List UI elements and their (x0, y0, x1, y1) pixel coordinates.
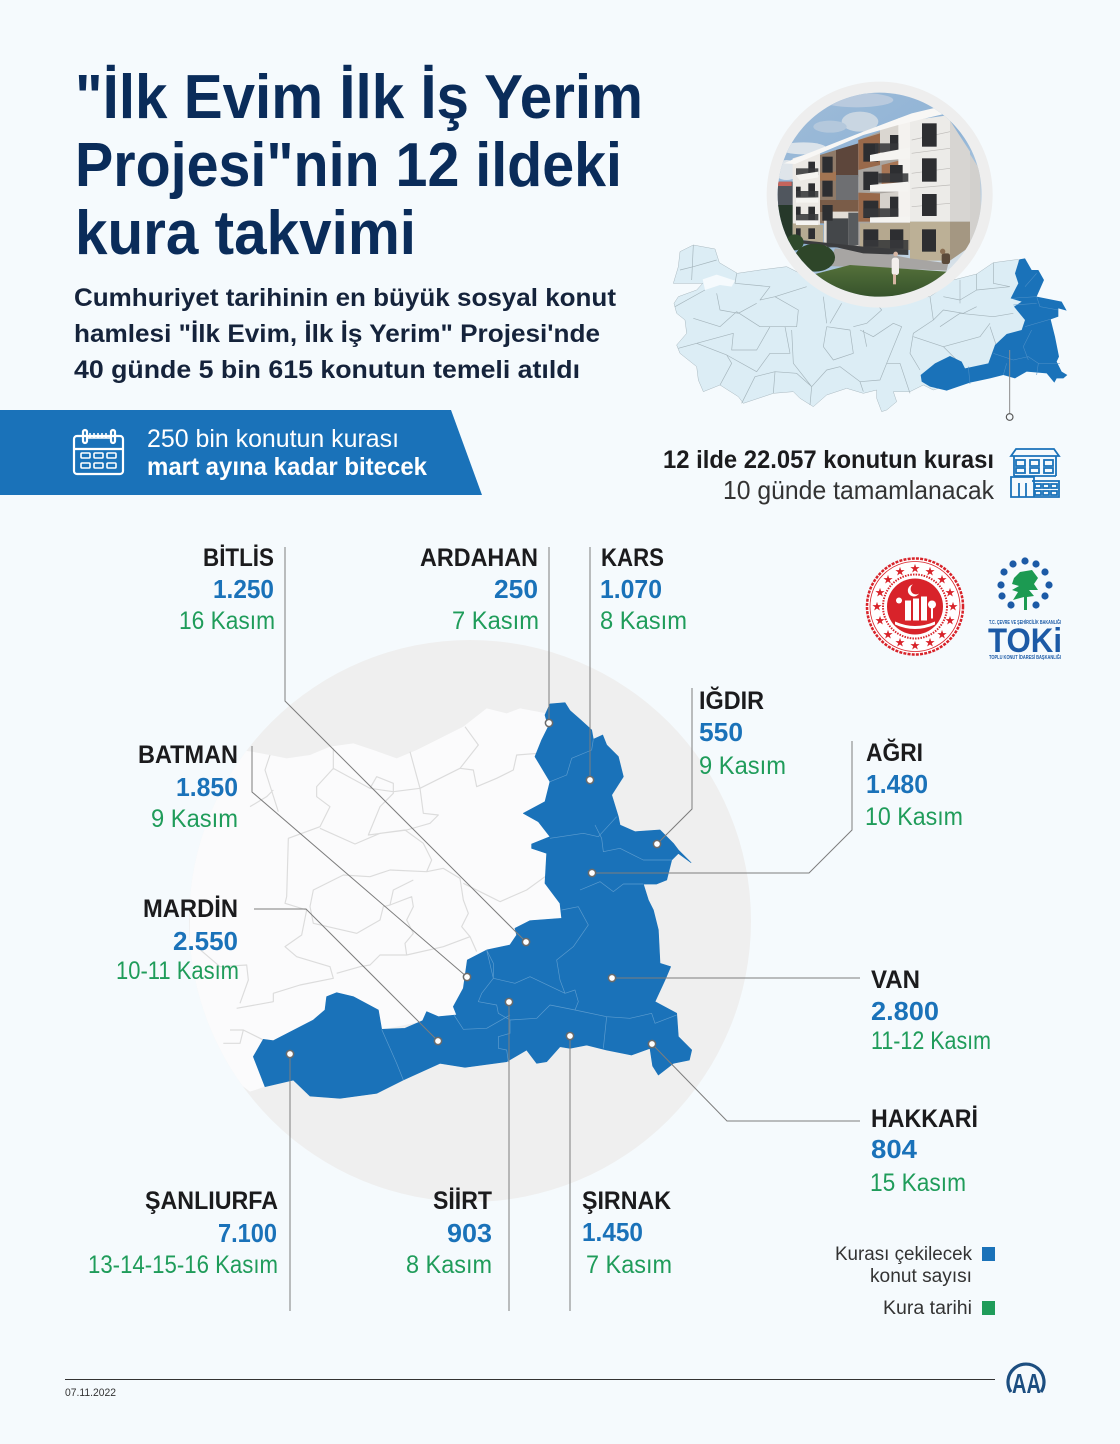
logo: ministry seal: ★ (945, 614, 955, 628)
logo: ministry seal (867, 558, 963, 654)
banner text: 250 bin konutun kurası (147, 425, 399, 453)
label: Şırnak: 7 Kasım (586, 1251, 672, 1279)
icon: apartment building (1011, 449, 1059, 497)
banner text: mart ayına kadar bitecek (147, 453, 427, 481)
ground (827, 248, 948, 271)
connector lines (252, 547, 860, 1311)
label: Ardahan: 7 Kasım (452, 607, 539, 635)
logo: TOKİ: T.C. ÇEVRE VE ŞEHİRCİLİK BAKANLIĞI (989, 618, 1061, 626)
middle block (858, 123, 910, 250)
subtitle: hamlesi "İlk Evim, İlk İş Yerim" Projesi'nde (74, 320, 600, 348)
title: "İlk Evim İlk İş Yerim (75, 63, 643, 132)
label: Hakkari: 15 Kasım (870, 1169, 966, 1197)
logo: TOKİ: TOPLU KONUT İDARESİ BAŞKANLIĞI (989, 653, 1061, 661)
label: Ardahan: 250 (494, 574, 538, 604)
photo: housing block (767, 82, 993, 308)
icon: calendar (74, 430, 123, 474)
label: Bitlis: 1.250 (213, 574, 274, 604)
label: Siirt: 903 (447, 1218, 492, 1248)
label: Iğdır: IĞDIR (699, 686, 764, 715)
label: Şanlıurfa: 13-14-15-16 Kasım (88, 1251, 278, 1279)
legend: konut sayısı (870, 1266, 972, 1287)
label: Şanlıurfa (88, 1187, 278, 1279)
label: Mardin (116, 895, 239, 985)
title (75, 63, 643, 268)
roof slab (784, 107, 944, 164)
logo: AA: AA (1012, 1368, 1041, 1399)
far wing (970, 154, 981, 242)
map: non-highlighted provinces (190, 708, 563, 1092)
callout: 12 provinces: 10 günde tamamlanacak (723, 475, 995, 505)
label: Ağrı: 10 Kasım (865, 803, 963, 831)
label: Van (871, 966, 991, 1055)
logo: ministry seal: ★ (872, 600, 882, 614)
callout: 12 provinces: 12 ilde 22.057 konutun kurası (663, 446, 994, 474)
label: Ardahan (420, 544, 539, 635)
label: Bitlis (179, 544, 275, 635)
connector: overview pin (1006, 350, 1013, 420)
label: Siirt (406, 1187, 492, 1279)
logo: ministry seal: ★ (937, 628, 947, 642)
label: Bitlis: BİTLİS (203, 544, 274, 572)
callout: 12 provinces (663, 446, 995, 505)
footer rule (65, 1378, 995, 1380)
title: kura takvimi (75, 199, 416, 268)
neighbouring house (777, 182, 793, 208)
balcony slabs (796, 147, 910, 225)
label: Iğdır (699, 686, 786, 780)
label: Siirt: SİİRT (433, 1187, 492, 1215)
label: Hakkari: HAKKARİ (871, 1105, 978, 1133)
subtitle (74, 284, 617, 384)
label: Van: 2.800 (871, 996, 939, 1026)
label: Kars: 1.070 (600, 574, 662, 604)
label: Şırnak (582, 1187, 672, 1279)
logo: ministry seal: ★ (910, 562, 920, 576)
label: Batman (138, 741, 238, 833)
label: Şanlıurfa: ŞANLIURFA (145, 1187, 278, 1215)
label: Kars (600, 544, 687, 635)
title: Projesi"nin 12 ildeki (75, 131, 622, 200)
label: Ağrı: 1.480 (866, 769, 928, 799)
subtitle: Cumhuriyet tarihinin en büyük sosyal konut (74, 284, 617, 312)
legend: Kurası çekilecek (835, 1244, 972, 1265)
label: Hakkari (870, 1105, 978, 1197)
map: highlighted provinces (253, 703, 692, 1098)
logo: ministry seal: ★ (945, 586, 955, 600)
label: Van: VAN (871, 966, 920, 994)
subtitle: 40 günde 5 bin 615 konutun temeli atıldı (74, 356, 580, 384)
label: Ağrı: AĞRI (866, 738, 923, 767)
logo: TOKİ: TOKi (988, 622, 1062, 660)
label: Bitlis: 16 Kasım (179, 607, 275, 635)
label: Ardahan: ARDAHAN (420, 544, 538, 572)
logo: ministry seal: ★ (883, 628, 893, 642)
legend: Kura tarihi (883, 1298, 972, 1319)
logo: ministry seal: ★ (895, 636, 905, 650)
map: Turkey overview (673, 245, 1067, 420)
label: Şırnak: 1.450 (582, 1217, 643, 1247)
logo: AA (1008, 1364, 1044, 1399)
label: Van: 11-12 Kasım (871, 1027, 991, 1055)
date: 07.11.2022 (65, 1387, 116, 1399)
windows (796, 123, 937, 252)
label: Mardin: 10-11 Kasım (116, 957, 239, 985)
label: Mardin: 2.550 (173, 926, 238, 956)
logo: ministry seal: ★ (925, 636, 935, 650)
label: Iğdır: 550 (699, 717, 743, 747)
label: Siirt: 8 Kasım (406, 1251, 492, 1279)
label: Iğdır: 9 Kasım (699, 752, 786, 780)
label: Şırnak: ŞIRNAK (582, 1187, 671, 1215)
logo: ministry seal: ★ (910, 638, 920, 652)
map backdrop circle (189, 640, 751, 1202)
banner (0, 410, 482, 495)
label: Kars: KARS (601, 544, 664, 572)
logo: ministry seal: ★ (895, 564, 905, 578)
balcony rails (796, 143, 908, 250)
logo: ministry seal: ★ (948, 600, 958, 614)
logo: ministry seal: ★ (883, 572, 893, 586)
map dots (286, 719, 661, 1058)
centre tower (820, 150, 836, 223)
label: Hakkari: 804 (871, 1134, 918, 1164)
banner text (147, 425, 427, 481)
logo: ministry seal: ★ (937, 572, 947, 586)
label: Batman: 1.850 (176, 772, 238, 802)
left wing (793, 150, 820, 240)
logo: ministry seal: ★ (875, 586, 885, 600)
label: Kars: 8 Kasım (600, 607, 687, 635)
right block (898, 118, 910, 217)
label: Şanlıurfa: 7.100 (218, 1218, 277, 1248)
label: Ağrı (865, 738, 963, 831)
label: Mardin: MARDİN (143, 895, 238, 923)
logo: TOKİ (988, 557, 1062, 661)
logo: ministry seal: ★ (875, 614, 885, 628)
logo: ministry seal: ★ (925, 564, 935, 578)
label: Batman: 9 Kasım (151, 805, 238, 833)
legend (835, 1244, 995, 1319)
label: Batman: BATMAN (138, 741, 238, 769)
